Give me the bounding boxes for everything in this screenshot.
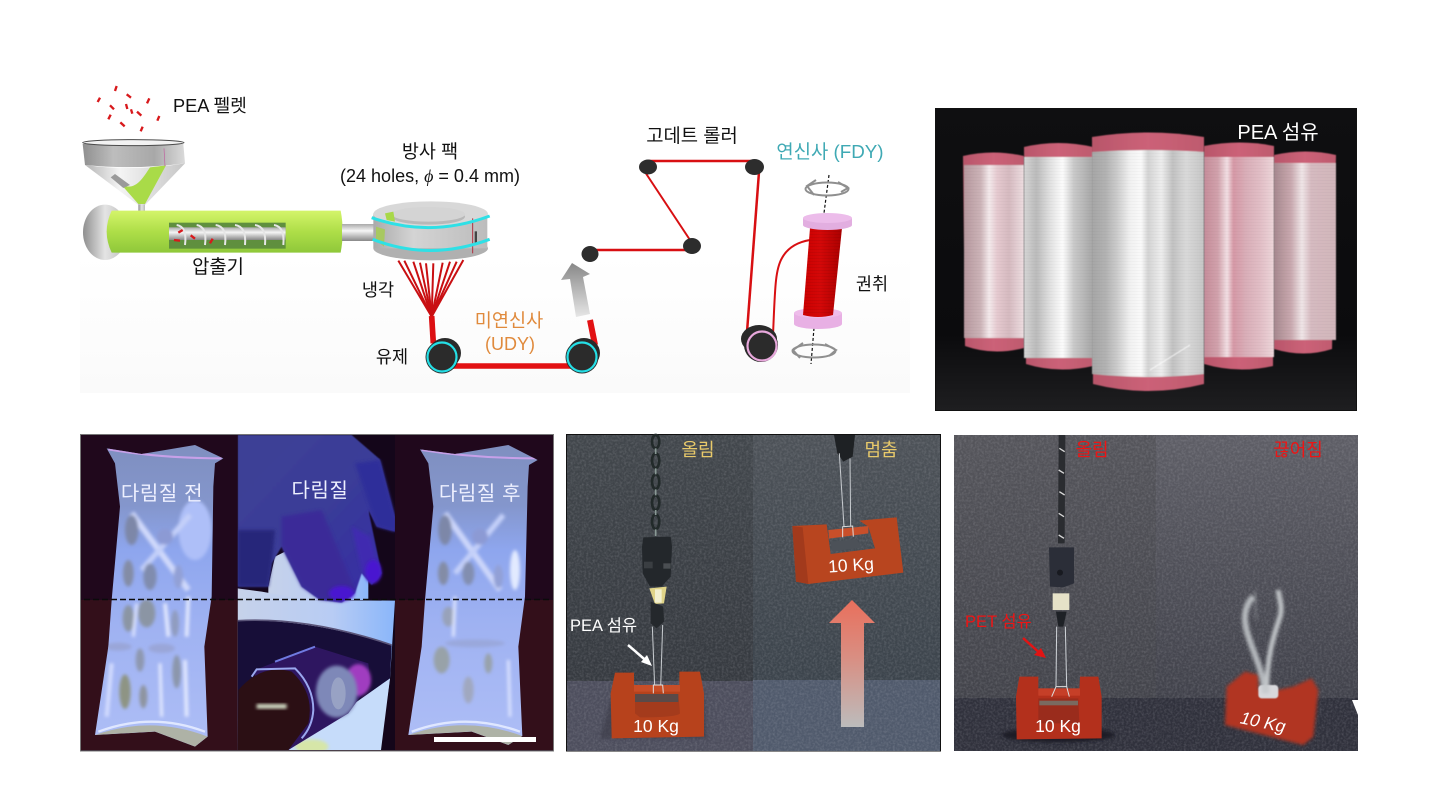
icon: feed hopper: [83, 140, 185, 212]
photo: chain and hook: [1049, 435, 1074, 687]
label: before ironing: 다림질 전: [121, 482, 203, 505]
spool: center: [1092, 132, 1204, 391]
photo: weight on floor: [1002, 677, 1115, 742]
icon: roller two: [566, 338, 600, 374]
label: drawn yarn FDY: 연신사 (FDY): [776, 141, 884, 162]
undrawn yarn line: [445, 320, 595, 366]
panel: PEA fiber spools photo: [936, 108, 1356, 410]
arrow: gray upward: [561, 263, 590, 317]
arrow: points to PET fiber: [1023, 638, 1042, 655]
arrow: points to PEA fiber: [628, 645, 650, 664]
label: lifting: 올림: [681, 440, 715, 460]
photo: chain and hook: [642, 435, 672, 687]
sample: before ironing: [95, 445, 223, 747]
label: 10 Kg weight left: 10 Kg: [633, 716, 679, 736]
label: PEA fiber: PEA 섬유: [570, 616, 637, 635]
icon: connector pipe: [342, 224, 375, 241]
sample: after ironing: [408, 445, 538, 745]
icon: spin pack: [372, 201, 490, 260]
label: broken: 끊어짐: [1273, 440, 1323, 460]
label: PEA pellets: PEA 펠렛: [173, 96, 247, 116]
panel: ironing test under UV: [80, 434, 554, 754]
photo: raised weight: [792, 435, 903, 584]
icon: godet rollers: [582, 159, 764, 262]
panel: PET fiber breaking: [954, 435, 1358, 751]
panel: PEA fiber lifting 10 kg: [566, 434, 940, 751]
label: 10 Kg left: 10 Kg: [1035, 716, 1081, 736]
label: undrawn yarn: 미연신사: [475, 310, 543, 331]
label: PEA fiber: PEA 섬유: [1237, 121, 1319, 144]
dashed fold line: [84, 598, 552, 600]
spool: far left: [963, 152, 1024, 352]
label: PET fiber: PET 섬유: [965, 612, 1032, 631]
icon: oiling roller: [426, 338, 461, 374]
panel: melt spinning process diagram: [80, 86, 910, 393]
label: extruder: 압출기: [192, 256, 244, 277]
label: spin pack: 방사 팩: [402, 141, 458, 162]
drawn yarn path: [590, 161, 810, 335]
photo: weight on floor: [600, 672, 707, 738]
label: undrawn yarn: (UDY): [485, 334, 535, 354]
icon: rotation arrows: [792, 180, 848, 358]
icon: cooling filaments: [398, 260, 463, 343]
label: lifting: 올림: [1075, 440, 1109, 460]
icon: extruder barrel with screw: [83, 205, 343, 260]
label: spin pack: (24 holes, ϕ = 0.4 mm): [340, 166, 520, 186]
photo: dropped weight with broken fibers: [1225, 590, 1318, 745]
icon: winding spool: [794, 175, 852, 364]
arrow: upward motion: [829, 600, 875, 727]
label: stopped: 멈춤: [864, 440, 898, 460]
label: 10 Kg dropped: 10 Kg: [1239, 707, 1288, 737]
icon: PEA pellets: [98, 86, 159, 131]
label: 10 Kg weight right: 10 Kg: [827, 553, 875, 577]
label: undrawn yarn: [475, 310, 543, 354]
scale bar: [434, 737, 536, 742]
label: spin pack: [340, 141, 520, 186]
spool: second right: [1204, 142, 1274, 370]
label: after ironing: 다림질 후: [439, 482, 521, 505]
spool: second left: [1024, 143, 1093, 370]
label: cooling: 냉각: [362, 280, 394, 300]
spool: far right: [1274, 152, 1336, 354]
label: ironing: 다림질: [292, 479, 348, 502]
label: winding: 권취: [856, 274, 888, 294]
infographic canvas: [80, 86, 1358, 752]
icon: winding roller: [741, 325, 778, 362]
label: oiling: 유제: [376, 347, 408, 367]
sample: ironing with hand and iron: [238, 435, 395, 754]
label: godet roller: 고데트 롤러: [646, 125, 738, 146]
